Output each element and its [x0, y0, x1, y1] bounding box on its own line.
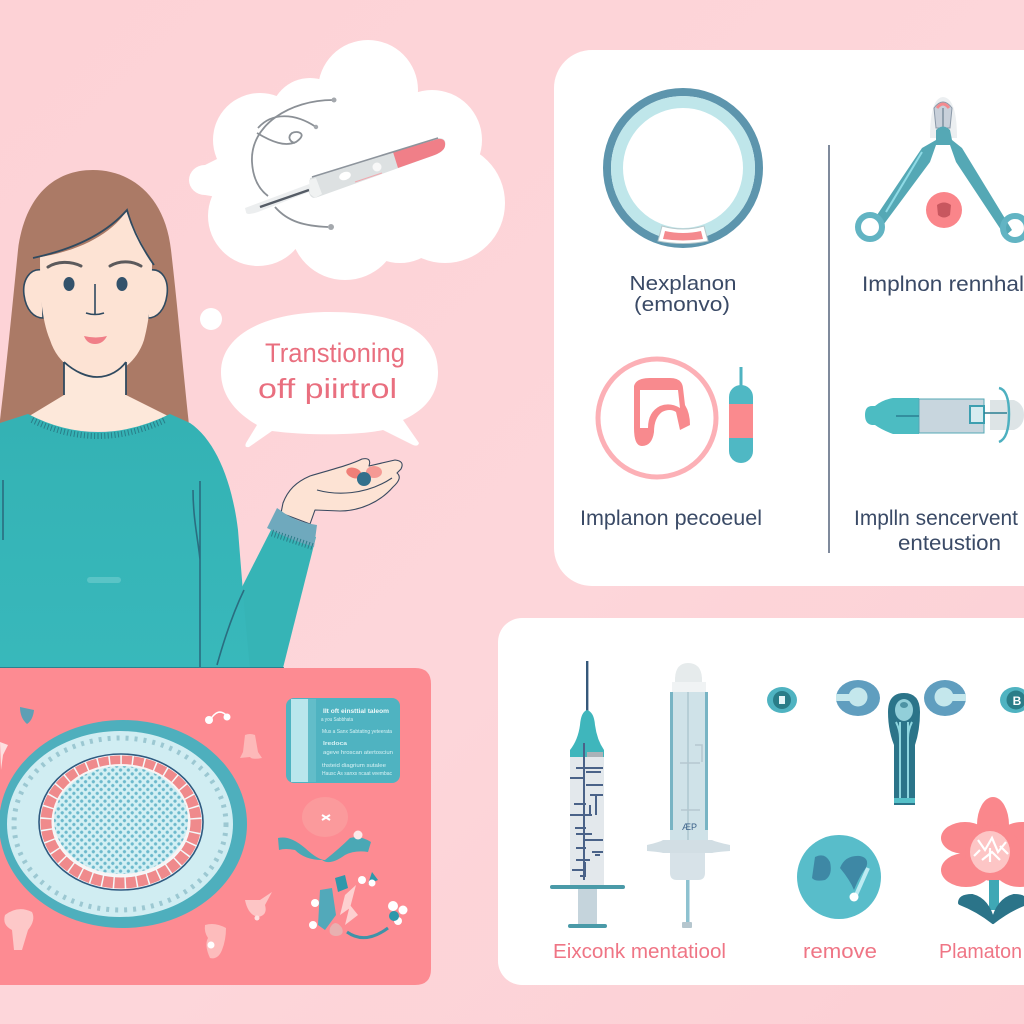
icon: applicator tube — [647, 663, 730, 928]
info card — [286, 698, 400, 783]
sweater torso — [0, 414, 250, 668]
icon: uterus device — [836, 680, 966, 805]
label: Implanon pecoeuel: Implanon pecoeuel — [580, 507, 762, 530]
icon: applicator tube: ÆP — [682, 822, 697, 832]
person illustration — [0, 170, 402, 668]
neck — [26, 360, 172, 432]
label: Implln sencervent: Implln sencervent — [854, 507, 1018, 530]
cuff — [267, 508, 317, 547]
icon: inserter device — [865, 388, 1024, 442]
hair — [0, 170, 189, 425]
card heading: Ilt oft einsttial taleom — [323, 708, 389, 715]
icon: capsule — [729, 367, 753, 463]
arm — [217, 528, 316, 668]
thought cloud with implant device — [189, 40, 505, 280]
label: Eixconk mentatiool: Eixconk mentatiool — [553, 941, 726, 963]
nose — [86, 284, 104, 314]
icon: implant applicator — [245, 138, 445, 214]
thought dot — [200, 308, 222, 330]
mouth — [84, 336, 107, 344]
panel: removal tools — [498, 618, 1024, 985]
sweater lines — [0, 480, 284, 668]
card text lines: ageve hroscan atertosciun — [323, 750, 393, 756]
card text lines: thsteid diagrium sutalee — [322, 763, 386, 769]
label: Implnon rennhal: Implnon rennhal — [862, 273, 1024, 296]
card text lines — [321, 717, 393, 777]
icon: implant wires — [252, 98, 336, 230]
label: emonvo: (emonvo) — [634, 294, 730, 316]
card text lines: Mus a Sanx Sabtating yeteerata — [322, 729, 392, 735]
ears — [24, 270, 167, 318]
pills in hand — [345, 466, 382, 486]
bubble text line 2: off piirtrol — [258, 373, 397, 404]
panel: implant options — [554, 50, 1024, 586]
icon: ring implant — [607, 92, 759, 244]
icon: small badge left — [767, 687, 797, 713]
icon: badge right: B — [1013, 694, 1022, 708]
collar ribbing — [32, 420, 165, 436]
speech bubble — [221, 312, 438, 447]
icon: flower — [941, 797, 1024, 922]
syringe scale ticks — [570, 743, 603, 880]
icon: syringe — [550, 661, 625, 928]
icon: forceps — [858, 97, 1024, 240]
panel: coral tray — [0, 668, 431, 985]
label: remove: remove — [803, 941, 877, 963]
label: enteustion: enteustion — [898, 532, 1001, 555]
icon: badge right — [1000, 687, 1024, 713]
bubble text line 1: Transtioning — [265, 338, 405, 368]
face — [40, 210, 152, 377]
divider — [828, 145, 830, 553]
card text lines: Iredoca — [323, 741, 347, 747]
eyebrows — [48, 262, 141, 267]
label: Nexplanon: Nexplanon — [630, 273, 736, 295]
card text lines: a you Sabbhata — [321, 717, 353, 723]
card text lines: Hausc As sanxs ncaat veembac — [322, 771, 392, 777]
eyes — [64, 277, 128, 291]
label: Plamaton: Plamaton — [939, 941, 1022, 963]
decorative floral elements — [0, 707, 408, 958]
icon: uterus in circle — [598, 359, 716, 477]
hand — [281, 459, 402, 524]
icon: teal circle — [797, 835, 881, 919]
chart: circular ring diagram — [0, 720, 247, 928]
